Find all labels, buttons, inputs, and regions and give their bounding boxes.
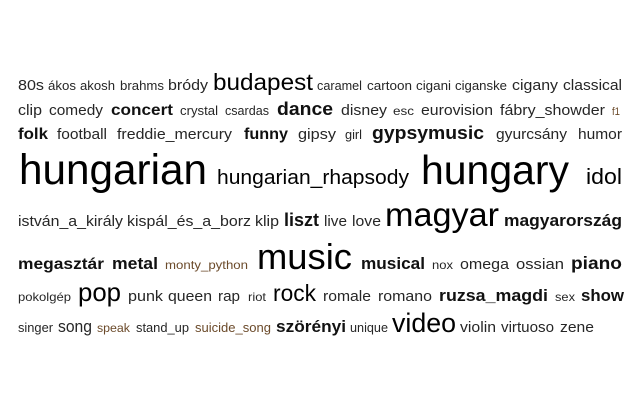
tag row 8: speak <box>97 321 131 335</box>
tag row 6: metal <box>112 255 158 273</box>
tag row 8: singer <box>18 321 53 335</box>
tag row 7: pokolgép <box>18 290 71 304</box>
tag row 1: classical <box>563 77 622 94</box>
tag row 1: bródy <box>168 77 208 94</box>
tag row 2: disney <box>341 102 387 119</box>
tag row 5: istván_a_király <box>18 213 123 230</box>
tag row 7: romano <box>378 288 432 305</box>
tag row 4: hungarian_rhapsody <box>217 167 409 189</box>
tag row 6: omega <box>460 256 510 273</box>
tag row 7: sex <box>555 290 575 304</box>
tag row 5: magyar <box>385 196 499 233</box>
tag row 1: cartoon <box>367 79 412 93</box>
tag row 7: rock <box>273 280 317 306</box>
tag row 5: live <box>324 214 347 230</box>
tag row 1: 80s <box>18 77 44 94</box>
tag row 8 <box>18 308 594 338</box>
tag row 2: fábry_showder <box>500 102 605 119</box>
tag row 1: ciganske <box>455 79 507 93</box>
tag row 1: caramel <box>317 79 362 93</box>
tag row 1: budapest <box>213 69 313 95</box>
tag row 2: dance <box>277 98 333 119</box>
tag row 2: csardas <box>225 104 269 118</box>
tag row 2: crystal <box>180 104 218 118</box>
tag row 8: stand_up <box>136 321 189 335</box>
tag row 8: suicide_song <box>195 321 271 335</box>
tag row 4: idol <box>586 164 622 189</box>
tag row 1: ákos <box>48 79 76 93</box>
tag row 3: gypsymusic <box>372 122 484 143</box>
tag row 7: ruzsa_magdi <box>439 287 548 305</box>
tag row 4 <box>19 146 622 193</box>
tag row 2: concert <box>111 102 174 119</box>
tag row 7 <box>18 279 624 307</box>
tag row 6: monty_python <box>165 258 248 272</box>
tag row 7: romale <box>323 288 371 305</box>
tag row 4: hungarian <box>19 146 207 193</box>
tag row 6: musical <box>361 255 425 273</box>
tag row 6: music <box>257 236 352 277</box>
tag row 8: zene <box>560 319 594 336</box>
tag row 1: cigani <box>416 79 451 93</box>
tag row 1: cigany <box>512 77 558 94</box>
tag row 4: hungary <box>421 147 569 193</box>
tag row 6: ossian <box>516 256 564 273</box>
tag row 5: kispál_és_a_borz <box>127 213 251 230</box>
tag row 3: girl <box>345 128 362 142</box>
tag row 1: brahms <box>120 79 164 93</box>
tag row 8: unique <box>350 321 388 335</box>
tag row 5: magyarország <box>504 212 622 230</box>
tag row 1 <box>18 69 622 95</box>
tag row 7: pop <box>78 279 121 307</box>
tag row 7: show <box>581 287 624 305</box>
tag row 5: klip <box>255 213 279 230</box>
tag row 7: rap <box>218 288 240 305</box>
tag row 5: love <box>352 214 381 230</box>
tag row 3: humor <box>578 126 622 143</box>
tag row 7: punk <box>128 288 163 305</box>
tag row 5 <box>18 196 622 233</box>
tag row 3 <box>18 122 622 143</box>
tag row 8: virtuoso <box>501 319 554 336</box>
tag row 2: comedy <box>49 102 103 119</box>
tag row 7: riot <box>248 290 267 304</box>
tag row 6: nox <box>432 258 453 272</box>
tag row 8: szörényi <box>276 318 346 336</box>
tag row 1: akosh <box>80 79 115 93</box>
tag row 3: gipsy <box>298 126 336 143</box>
tag row 8: video <box>392 308 456 338</box>
tag row 3: gyurcsány <box>496 126 568 143</box>
tag row 8: song <box>58 318 92 336</box>
tag row 6 <box>18 236 622 277</box>
tag row 6: megasztár <box>18 256 104 273</box>
tag row 2: f1 <box>612 106 620 118</box>
tag row 2: esc <box>393 104 414 118</box>
tag row 2 <box>18 98 620 119</box>
tag row 7: queen <box>168 288 212 305</box>
tag row 2: eurovision <box>421 102 493 119</box>
tag row 5: liszt <box>284 210 319 230</box>
tag row 3: folk <box>18 126 48 143</box>
tag row 3: football <box>57 126 107 143</box>
tag row 3: freddie_mercury <box>117 126 232 143</box>
tag row 2: clip <box>18 102 42 119</box>
tag row 8: violin <box>460 319 496 336</box>
tag row 6: piano <box>571 253 622 273</box>
tag row 3: funny <box>244 126 288 143</box>
